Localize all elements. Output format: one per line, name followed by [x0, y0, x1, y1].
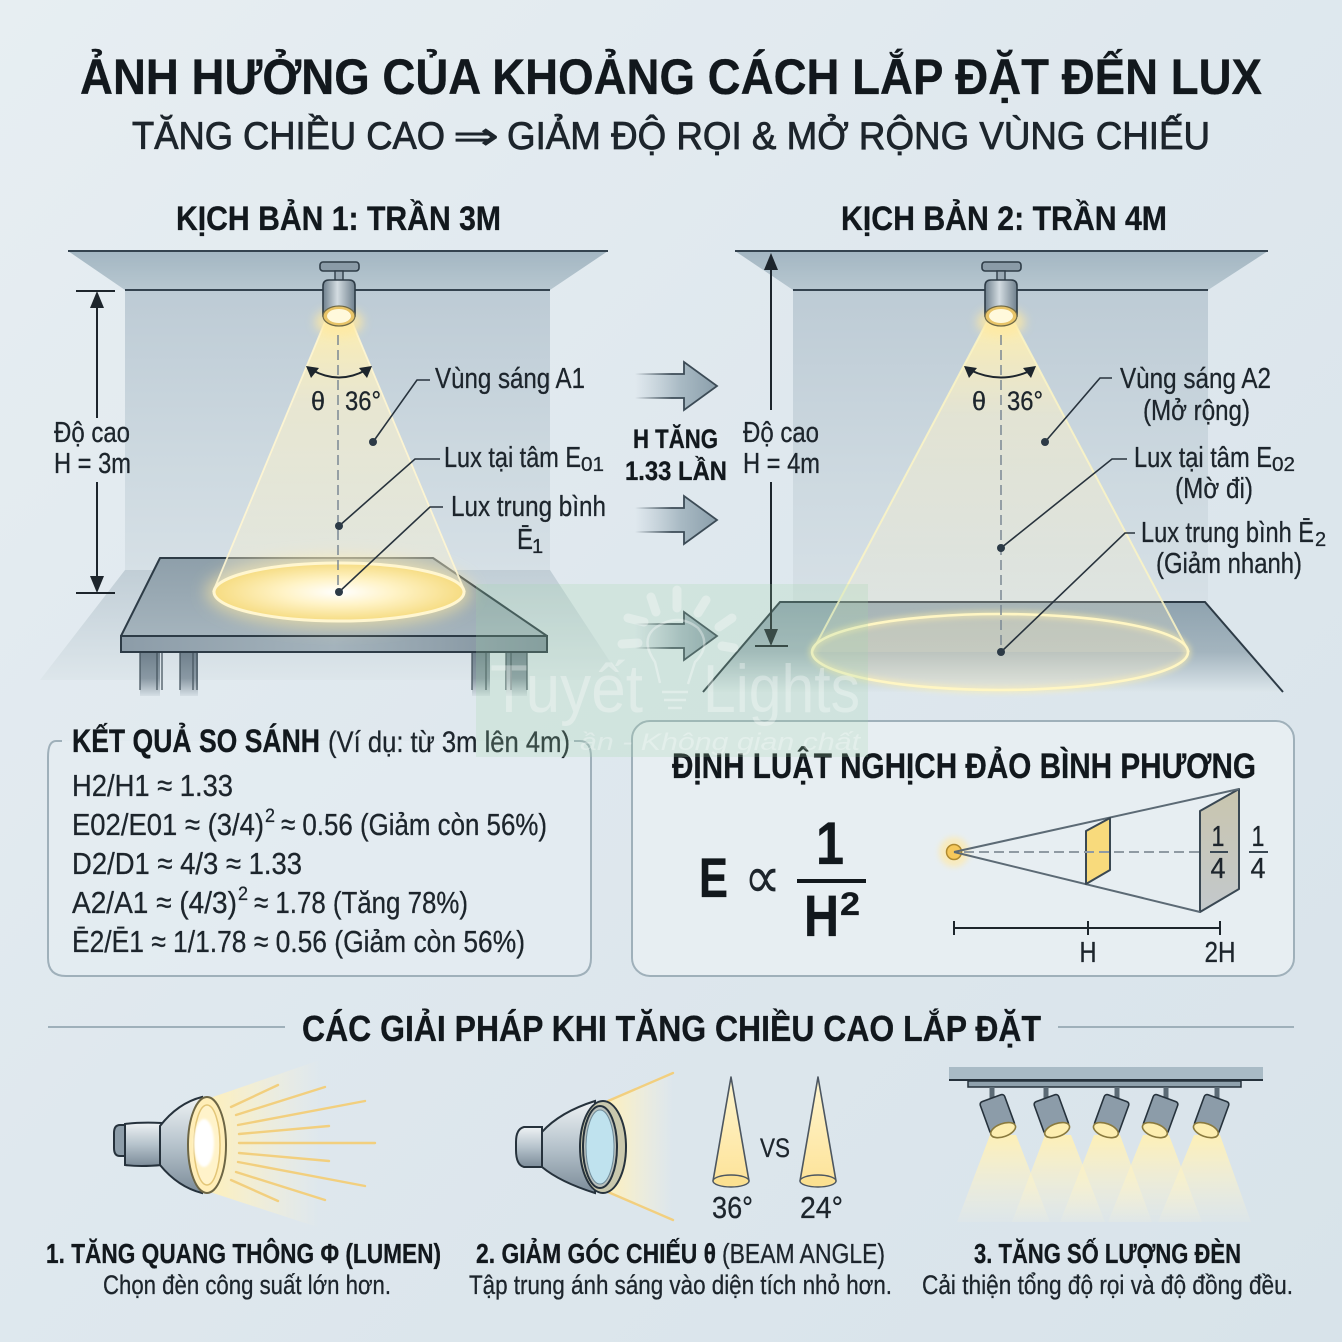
label: Lux trung bình E1: Lux trung bình	[451, 491, 606, 523]
subtitle: ⇒	[453, 114, 499, 158]
panel heading: (Ví dụ: từ 3m lên 4m)	[328, 726, 570, 759]
label: Vùng sáng A2	[1120, 363, 1271, 427]
light cone A2	[812, 322, 1189, 690]
label: height 4m: H = 4m	[743, 448, 820, 480]
panel heading: KẾT QUẢ SO SÁNH	[72, 723, 320, 759]
label: Vùng sáng A2: Vùng sáng A2	[1120, 363, 1271, 395]
watermark: Lights	[703, 651, 860, 727]
label: height 3m: H = 3m	[54, 448, 131, 480]
row E mean: Ē2/Ē1 ≈ 1/1.78 ≈ 0.56 (Giảm còn 56%)	[72, 924, 525, 959]
light source	[939, 837, 969, 867]
beam angle arc	[306, 366, 372, 378]
panel: inverse square law	[632, 721, 1294, 976]
formula: E	[699, 846, 728, 909]
rays	[954, 789, 1239, 912]
label: solution 1	[46, 1237, 441, 1300]
theta label: θ	[972, 386, 986, 416]
section divider right	[1058, 1026, 1294, 1028]
light cone A1	[206, 322, 472, 628]
label: solution 2: (BEAM ANGLE)	[722, 1238, 885, 1269]
row A	[72, 884, 468, 920]
row A: 2	[238, 884, 248, 905]
label: 24 degrees: 24°	[800, 1190, 843, 1225]
center axis	[337, 335, 339, 592]
icon: multiple track lamps	[949, 1067, 1263, 1222]
label: Lux trung bình E1: Ē	[517, 524, 533, 556]
formula: ∝	[744, 843, 781, 913]
back wall	[125, 290, 550, 575]
far plane	[1200, 789, 1239, 912]
panel frame	[632, 721, 1294, 976]
heading: scenario 2: KỊCH BẢN 2: TRẦN 4M	[841, 200, 1167, 238]
row E0: ≈ 0.56 (Giảm còn 56%)	[281, 807, 547, 842]
label: height 4m	[743, 417, 820, 480]
fraction in plane: 4	[1210, 853, 1226, 885]
watermark: ần - Không gian chất	[580, 729, 862, 756]
label: solution 1: 1. TĂNG QUANG THÔNG Φ (LUMEN)	[46, 1237, 441, 1269]
row H: H2/H1 ≈ 1.33	[72, 768, 233, 803]
label: Lux trung bình E1: 1	[532, 536, 543, 558]
panel frame	[48, 741, 591, 976]
row E0: E02/E01 ≈ (3/4)	[72, 807, 264, 842]
subtitle: GIẢM ĐỘ RỌI & MỞ RỘNG VÙNG CHIẾU	[507, 114, 1210, 158]
label: height 4m: Độ cao	[743, 417, 819, 449]
subtitle	[132, 114, 1210, 158]
label: Lux trung bình E2: (Giảm nhanh)	[1156, 548, 1302, 580]
label: H tăng 1.33 lần: 1.33 LẦN	[625, 455, 727, 486]
panel: scenario 2 room	[703, 251, 1326, 692]
beam angle arc	[964, 366, 1036, 378]
subtitle: TĂNG CHIỀU CAO	[132, 114, 445, 158]
formula: 1	[816, 810, 844, 877]
label: Lux trung bình E2: 2	[1315, 529, 1326, 551]
arrow: middle	[635, 496, 717, 544]
label: Vùng sáng A1: Vùng sáng A1	[435, 363, 585, 395]
height dimension 4m	[755, 253, 788, 646]
spotlight 2	[977, 262, 1025, 336]
formula	[699, 810, 866, 949]
near plane	[1086, 818, 1110, 884]
floor	[703, 602, 1283, 692]
floor edge	[703, 602, 1283, 692]
ceiling	[735, 251, 1268, 290]
label: solution 2: 2. GIẢM GÓC CHIẾU θ	[476, 1237, 716, 1269]
label: Lux trung bình E2	[1141, 517, 1326, 580]
label: Lux tại tâm E02: (Mờ đi)	[1175, 473, 1253, 505]
panel: comparison results	[48, 723, 591, 976]
back wall	[793, 290, 1208, 602]
label: Lux tại tâm E01: Lux tại tâm E	[444, 442, 581, 474]
fraction in plane: 1	[1212, 821, 1224, 853]
fraction in plane	[1210, 821, 1228, 885]
label: solution 3: 3. TĂNG SỐ LƯỢNG ĐÈN	[974, 1237, 1241, 1269]
ceiling	[68, 251, 608, 290]
lamp heads	[979, 1094, 1230, 1141]
icon: cone 36	[713, 1077, 749, 1187]
label: Lux tại tâm E02: 02	[1272, 454, 1295, 476]
label: H tăng 1.33 lần	[625, 423, 727, 486]
center axis	[1000, 335, 1002, 652]
floor	[40, 570, 622, 680]
label: Lux tại tâm E02: Lux tại tâm E	[1134, 442, 1272, 474]
ceiling strip	[949, 1067, 1263, 1080]
formula: 2	[840, 886, 860, 922]
label: H tăng 1.33 lần: H TĂNG	[633, 423, 718, 454]
row E0	[72, 806, 547, 842]
label: 36 degrees: 36°	[712, 1190, 753, 1225]
icon: cone 24	[800, 1077, 836, 1187]
label: Vùng sáng A2: (Mở rộng)	[1143, 395, 1250, 427]
formula: H	[804, 884, 839, 949]
label: solution 1: Chọn đèn công suất lớn hơn.	[103, 1270, 391, 1300]
axis	[964, 851, 1200, 853]
icon: narrow beam lamp	[516, 1073, 673, 1220]
arrow: bottom	[635, 612, 717, 660]
icon: bright lamp with rays	[114, 1060, 375, 1228]
table	[121, 558, 547, 696]
label: solution 2: Tập trung ánh sáng vào diện tích nhỏ hơn.	[469, 1270, 892, 1300]
panel heading	[72, 723, 570, 759]
beams	[957, 1135, 1251, 1222]
watermark	[476, 584, 868, 757]
leaders	[997, 378, 1135, 656]
spotlight 1	[315, 262, 363, 336]
label: solution 3	[922, 1237, 1293, 1300]
diagram: light spreading	[939, 789, 1268, 969]
label: Lux tại tâm E02	[1134, 442, 1295, 505]
distance scale: 2H	[1204, 937, 1236, 969]
leader: vùng sáng A1	[335, 380, 443, 596]
watermark: Tuyết	[490, 651, 643, 727]
arrow: top	[635, 362, 717, 410]
section divider left	[48, 1026, 285, 1028]
theta label: θ	[311, 386, 325, 416]
panel heading: ĐỊNH LUẬT NGHỊCH ĐẢO BÌNH PHƯƠNG	[672, 746, 1256, 786]
row A: A2/A1 ≈ (4/3)	[72, 885, 237, 920]
panel: scenario 1 room	[40, 251, 622, 696]
angle label: 36°	[345, 386, 381, 416]
label: height 3m: Độ cao	[54, 417, 130, 449]
label: Lux trung bình E1	[451, 491, 606, 558]
fraction beside plane: 4	[1250, 853, 1266, 885]
distance scale: H	[1080, 937, 1096, 969]
label: solution 2	[469, 1237, 892, 1300]
title: ẢNH HƯỞNG CỦA KHOẢNG CÁCH LẮP ĐẶT ĐẾN LUX	[80, 48, 1262, 105]
track	[968, 1081, 1241, 1087]
row D: D2/D1 ≈ 4/3 ≈ 1.33	[72, 846, 302, 881]
heading: scenario 1: KỊCH BẢN 1: TRẦN 3M	[176, 200, 501, 238]
distance scale	[954, 921, 1236, 969]
angle label: 36°	[1007, 386, 1043, 416]
label: Lux tại tâm E01: 01	[581, 454, 604, 476]
row E0: 2	[265, 806, 275, 827]
section heading: solutions: CÁC GIẢI PHÁP KHI TĂNG CHIỀU CAO LẮP ĐẶT	[302, 1007, 1041, 1049]
label: vs: VS	[760, 1133, 790, 1163]
label: height 3m	[54, 417, 131, 480]
row A: ≈ 1.78 (Tăng 78%)	[254, 885, 468, 920]
fraction beside plane: 1	[1252, 821, 1264, 853]
fraction beside plane	[1249, 821, 1268, 885]
height dimension 3m	[76, 291, 115, 593]
